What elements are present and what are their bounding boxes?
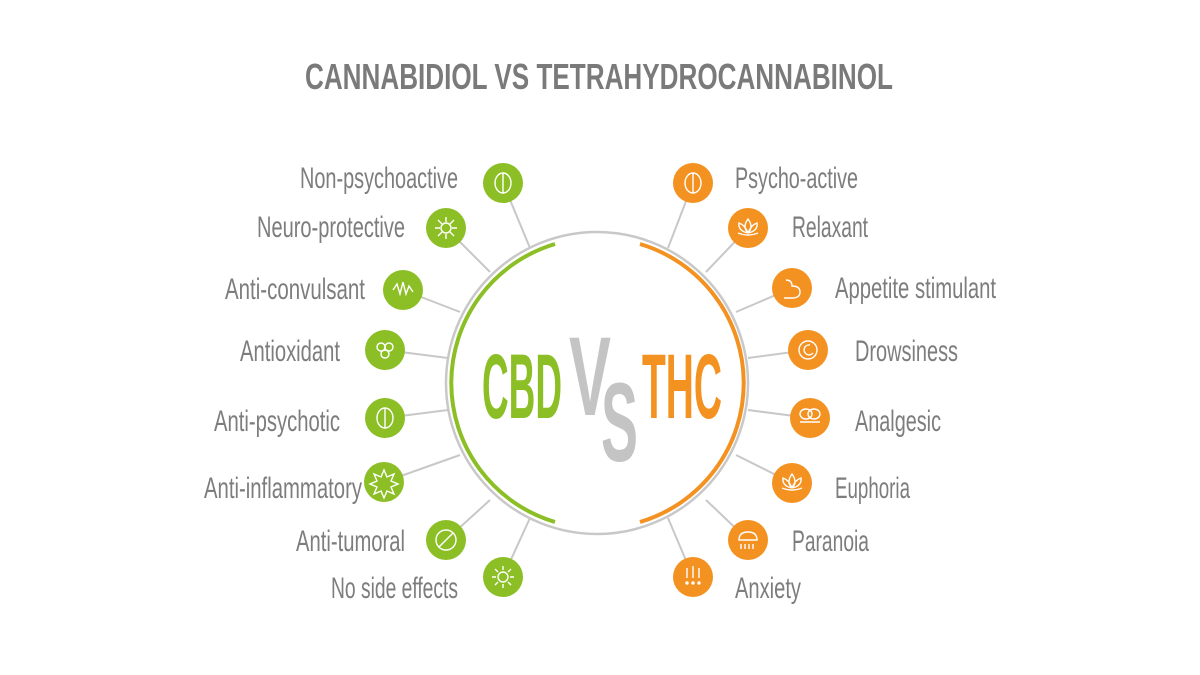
THC properties: Relaxant xyxy=(792,211,868,244)
THC properties: Psycho-active xyxy=(735,162,858,195)
connector lines xyxy=(384,183,810,577)
THC properties: Drowsiness xyxy=(855,335,958,368)
CBD properties: Anti-convulsant xyxy=(225,273,365,306)
VS label xyxy=(569,314,638,485)
orange arc xyxy=(640,244,744,522)
CBD properties: Anti-psychotic xyxy=(214,405,340,438)
THC icons xyxy=(673,163,830,597)
text: S xyxy=(601,360,638,485)
CBD properties: Anti-inflammatory xyxy=(204,472,362,505)
CBD properties: Antioxidant xyxy=(240,335,340,368)
THC properties: Paranoia xyxy=(792,525,869,558)
THC properties: Euphoria xyxy=(835,472,910,505)
central circle xyxy=(446,232,748,534)
CBD icons xyxy=(364,163,523,597)
text: THC xyxy=(642,336,722,438)
CBD properties: Neuro-protective xyxy=(257,211,405,244)
THC properties: Appetite stimulant xyxy=(835,272,996,305)
CBD properties xyxy=(204,162,458,605)
CBD properties: Anti-tumoral xyxy=(296,525,405,558)
THC properties: Analgesic xyxy=(855,405,941,438)
CBD properties: Non-psychoactive xyxy=(300,162,458,195)
green arc xyxy=(451,244,555,522)
VS label: V xyxy=(569,314,611,439)
CBD properties: No side effects xyxy=(331,572,458,605)
THC properties xyxy=(735,162,996,605)
text: CBD xyxy=(482,336,562,438)
title: CANNABIDIOL VS TETRAHYDROCANNABINOL xyxy=(305,56,893,97)
icon glyphs xyxy=(370,173,820,588)
THC properties: Anxiety xyxy=(735,572,801,605)
